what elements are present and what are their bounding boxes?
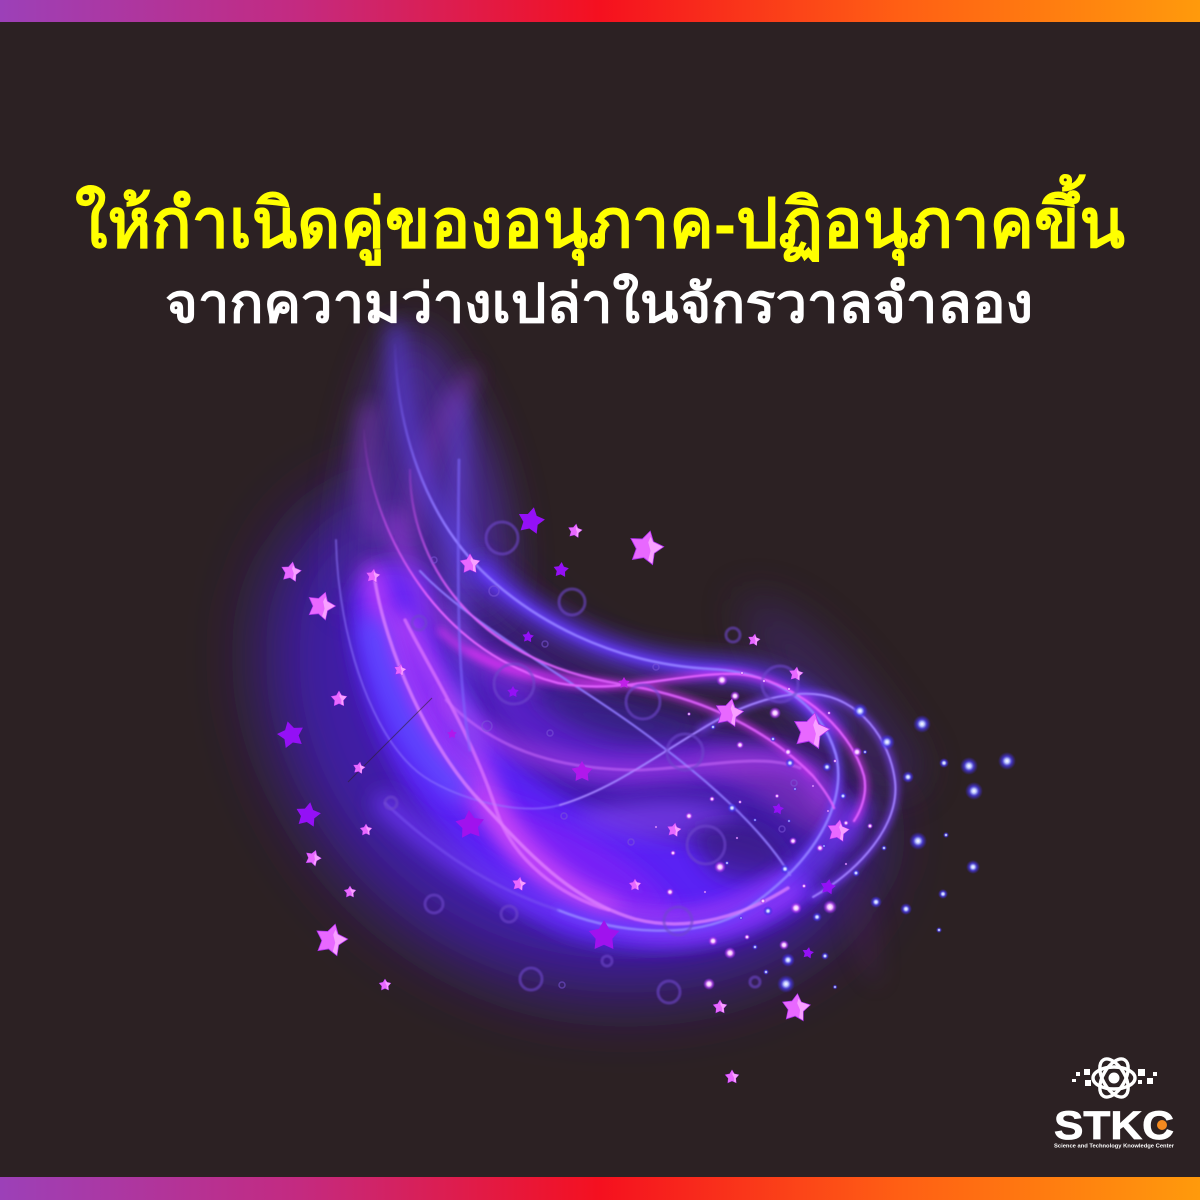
hairline streak [348, 698, 432, 782]
logo tagline: Science and Technology Knowledge Center [1054, 1144, 1175, 1150]
crescent body glow [350, 563, 855, 947]
icon: orange dot [1157, 1120, 1167, 1130]
violet stars [275, 505, 837, 959]
illustration: glowing purple swirl [265, 330, 1016, 1083]
pink stars [279, 522, 851, 1083]
logo: STKC [1054, 1054, 1175, 1150]
title line 2: จากความว่างเปล่าในจักรวาลจำลอง [165, 272, 1033, 334]
soft outer glow [265, 330, 925, 994]
bright curves [336, 345, 895, 931]
small faint rings [431, 557, 797, 988]
title line 1: ให้กำเนิดคู่ของอนุภาค-ปฏิอนุภาคขึ้น [75, 173, 1125, 267]
logo wordmark: STKC [1054, 1104, 1174, 1148]
glow under curves [440, 571, 895, 931]
glowing blue particles [710, 703, 1016, 993]
top gradient bar [0, 0, 1200, 22]
glowing pink particles [654, 671, 873, 990]
bottom gradient bar [0, 1177, 1200, 1200]
icon: atom [1072, 1054, 1157, 1102]
bubble rings [385, 522, 798, 1003]
wide luminous bands [365, 330, 860, 931]
